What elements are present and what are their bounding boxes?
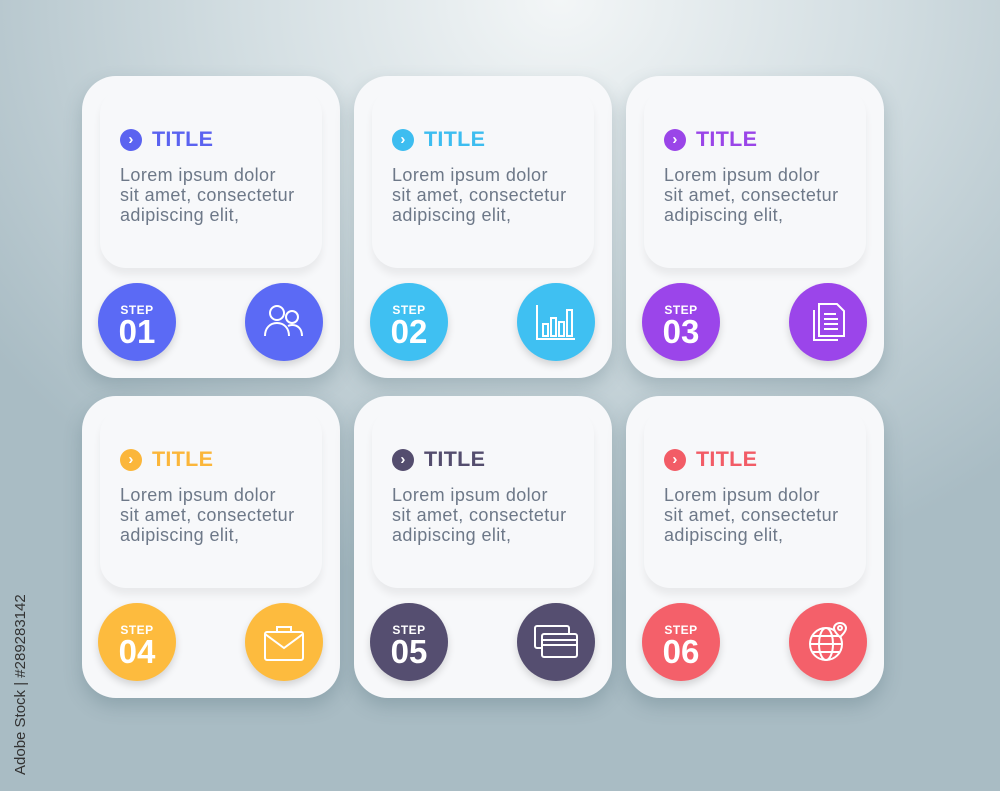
text 4: sit amet, consectetur bbox=[120, 505, 294, 525]
step 06 bbox=[642, 603, 720, 681]
text 4: adipiscing elit, bbox=[120, 525, 239, 545]
title 2: TITLE bbox=[424, 127, 485, 151]
step 02 bbox=[370, 283, 448, 361]
step 05: STEP bbox=[392, 623, 426, 637]
icon: bag bbox=[245, 603, 323, 681]
card 1 bbox=[82, 76, 340, 378]
text 6: Lorem ipsum dolor bbox=[664, 485, 820, 505]
title 6 bbox=[664, 447, 757, 471]
title 2: › bbox=[400, 130, 406, 148]
title 1 bbox=[120, 127, 213, 151]
text 5: adipiscing elit, bbox=[392, 525, 511, 545]
step 03: STEP bbox=[664, 303, 698, 317]
title 3: › bbox=[672, 130, 678, 148]
icon: users bbox=[245, 283, 323, 361]
text 3 bbox=[664, 165, 838, 225]
title 5 bbox=[392, 447, 485, 471]
text 2: adipiscing elit, bbox=[392, 205, 511, 225]
title 4: › bbox=[128, 450, 134, 468]
side label: Adobe Stock | #289283142 bbox=[12, 594, 29, 775]
title 6: › bbox=[672, 450, 678, 468]
title 2 bbox=[392, 127, 485, 151]
card 5 bbox=[354, 396, 612, 698]
text 1 bbox=[120, 165, 294, 225]
icon: documents bbox=[789, 283, 867, 361]
text 6 bbox=[664, 485, 838, 545]
text 2 bbox=[392, 165, 566, 225]
title 3 bbox=[664, 127, 757, 151]
step 04 bbox=[98, 603, 176, 681]
title 1: TITLE bbox=[152, 127, 213, 151]
step 04: 04 bbox=[119, 633, 155, 670]
title 4: TITLE bbox=[152, 447, 213, 471]
step 01: STEP bbox=[120, 303, 154, 317]
text 4 bbox=[120, 485, 294, 545]
step 05: 05 bbox=[391, 633, 427, 670]
text 6: adipiscing elit, bbox=[664, 525, 783, 545]
card 6 bbox=[626, 396, 884, 698]
step 03: 03 bbox=[663, 313, 699, 350]
icon: chart bbox=[517, 283, 595, 361]
text 5: sit amet, consectetur bbox=[392, 505, 566, 525]
step 01 bbox=[98, 283, 176, 361]
step 05 bbox=[370, 603, 448, 681]
step 01: 01 bbox=[119, 313, 155, 350]
text 2: sit amet, consectetur bbox=[392, 185, 566, 205]
card 2 bbox=[354, 76, 612, 378]
step 06: 06 bbox=[663, 633, 699, 670]
text 3: Lorem ipsum dolor bbox=[664, 165, 820, 185]
text 4: Lorem ipsum dolor bbox=[120, 485, 276, 505]
title 3: TITLE bbox=[696, 127, 757, 151]
title 5: › bbox=[400, 450, 406, 468]
step 02: 02 bbox=[391, 313, 427, 350]
card 3 bbox=[626, 76, 884, 378]
card 4 bbox=[82, 396, 340, 698]
text 3: adipiscing elit, bbox=[664, 205, 783, 225]
text 2: Lorem ipsum dolor bbox=[392, 165, 548, 185]
step 06: STEP bbox=[664, 623, 698, 637]
text 5: Lorem ipsum dolor bbox=[392, 485, 548, 505]
text 5 bbox=[392, 485, 566, 545]
step 04: STEP bbox=[120, 623, 154, 637]
icon: globe pin bbox=[789, 603, 867, 681]
text 3: sit amet, consectetur bbox=[664, 185, 838, 205]
text 1: adipiscing elit, bbox=[120, 205, 239, 225]
text 6: sit amet, consectetur bbox=[664, 505, 838, 525]
title 6: TITLE bbox=[696, 447, 757, 471]
title 5: TITLE bbox=[424, 447, 485, 471]
title 1: › bbox=[128, 130, 134, 148]
step 02: STEP bbox=[392, 303, 426, 317]
text 1: Lorem ipsum dolor bbox=[120, 165, 276, 185]
title 4 bbox=[120, 447, 213, 471]
step 03 bbox=[642, 283, 720, 361]
icon: cards bbox=[517, 603, 595, 681]
text 1: sit amet, consectetur bbox=[120, 185, 294, 205]
